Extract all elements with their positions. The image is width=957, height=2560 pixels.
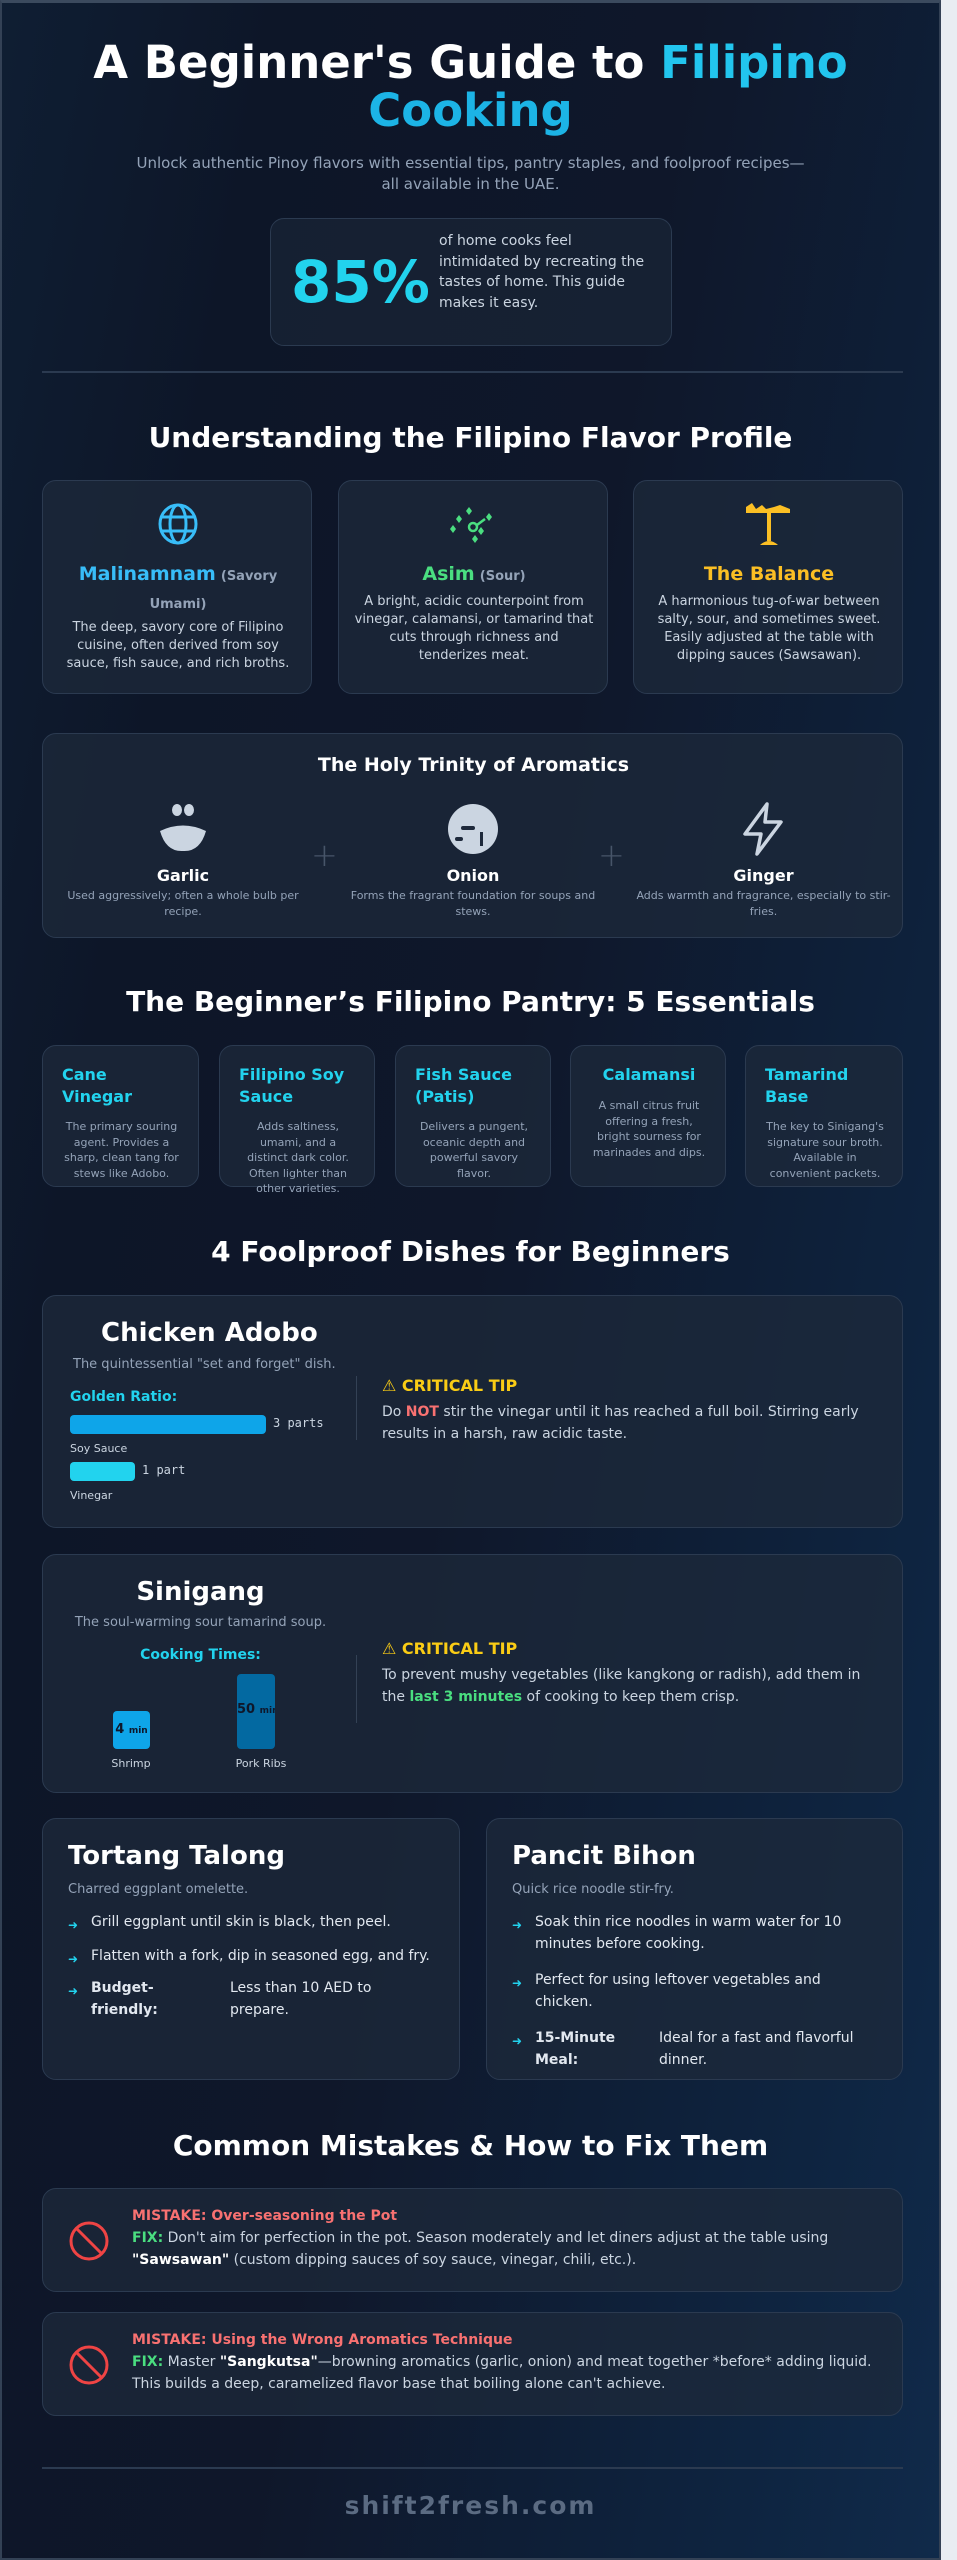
pantry card: cane vinegar: Cane [62, 1065, 107, 1084]
icon: scale [746, 503, 790, 545]
callout: critical tip [382, 1639, 860, 1705]
item: ginger [636, 802, 891, 918]
callout: critical tip: ⚠ CRITICAL TIP [382, 1376, 517, 1395]
chart: cooking times: Pork Ribs [236, 1757, 286, 1770]
panel: mistake 2: MISTAKE: Using the Wrong Aromatics Technique [132, 2332, 512, 2348]
chart: golden ratio: Soy Sauce [70, 1442, 127, 1455]
subtitle: The quintessential "set and forget" dish. [73, 1357, 336, 1372]
pantry card: soy sauce: Sauce [239, 1087, 293, 1106]
chart: cooking times: Shrimp [111, 1757, 151, 1770]
heading: Malinamnam (Savory Umami) [79, 563, 277, 612]
pantry card: soy sauce: Filipino Soy [239, 1065, 344, 1084]
panel: tortang talong: ➜ [68, 1952, 78, 1966]
panel: tortang talong: Budget- [91, 1980, 154, 1996]
panel: malinamnam [42, 480, 312, 694]
icon: onion [448, 804, 498, 854]
callout: critical tip: ⚠ CRITICAL TIP [382, 1639, 517, 1658]
icon: no [70, 2346, 108, 2384]
panel: pancit bihon: Ideal for a fast and flavorful dinner. [659, 2030, 854, 2068]
callout: critical tip: Do NOT stir the vinegar until it has reached a full boil. Stirring early results in a harsh, raw acidic taste. [382, 1404, 859, 1442]
subtitle: Unlock authentic Pinoy flavors with essential tips, pantry staples, and foolproof recipes—all available in the UAE. [136, 154, 805, 193]
panel: sinigang [42, 1554, 903, 1793]
label: Onion [447, 866, 499, 885]
panel: tortang talong: ➜ [68, 1984, 78, 1998]
panel: mistake 2 [42, 2312, 903, 2416]
panel: pancit bihon: Soak thin rice noodles in warm water for 10 minutes before cooking. [535, 1914, 841, 1952]
pantry card: cane vinegar: agent. Provides a [74, 1136, 169, 1148]
pantry card: fish sauce: Delivers a pungent, oceanic depth and powerful savory flavor. [420, 1120, 528, 1180]
heading: Asim (Sour) [422, 563, 526, 585]
icon: garlic [160, 804, 206, 851]
pantry card: calamansi [570, 1045, 726, 1187]
desc: Used aggressively; often a whole bulb per recipe. [67, 889, 299, 918]
panel: pancit bihon: Quick rice noodle stir-fry. [512, 1882, 674, 1897]
footer: shift2fresh.com [345, 2491, 596, 2520]
chart: golden ratio: 1 part [142, 1463, 185, 1477]
title: Chicken Adobo [101, 1318, 318, 1348]
label: Ginger [733, 866, 794, 885]
panel: tortang talong [42, 1818, 460, 2080]
panel: asim [338, 480, 608, 694]
heading: pantry: The Beginner’s Filipino Pantry: 5 Essentials [126, 985, 815, 1018]
callout: critical tip [382, 1376, 859, 1442]
pantry card: calamansi: A small citrus fruit offering a fresh, bright sourness for marinades and dips. [593, 1099, 705, 1158]
pantry card: cane vinegar: sharp, clean tang for [64, 1151, 179, 1164]
pantry card: fish sauce: (Patis) [415, 1087, 474, 1106]
label: Garlic [157, 866, 209, 885]
pantry card: calamansi: Calamansi [603, 1065, 695, 1084]
panel: balance [633, 480, 903, 694]
panel: pancit bihon: Perfect for using leftover vegetables and chicken. [535, 1972, 821, 2010]
panel: pancit bihon [486, 1818, 903, 2080]
stat box [270, 218, 672, 346]
icon: sour drops [450, 507, 492, 543]
panel: tortang talong: Charred eggplant omelette. [68, 1882, 248, 1897]
pantry card: fish sauce: Fish Sauce [415, 1065, 512, 1084]
callout: critical tip: To prevent mushy vegetables (like kangkong or radish), add them in the last 3 minutes of cooking to keep them crisp. [382, 1667, 860, 1705]
panel: pancit bihon: 15-Minute [535, 2030, 615, 2046]
pantry card: cane vinegar: stews like Adobo. [74, 1166, 169, 1180]
title [93, 36, 848, 137]
chart: cooking times: 4 min [115, 1722, 148, 1737]
panel: chicken adobo [42, 1295, 903, 1528]
chart: cooking times: Cooking Times: [140, 1647, 261, 1663]
stat number: 85% [291, 248, 430, 316]
panel: pancit bihon: Meal: [535, 2052, 578, 2068]
panel: mistake 1 [42, 2188, 903, 2292]
panel: holy trinity [42, 733, 903, 938]
pantry card: soy sauce: Adds saltiness, umami, and a distinct dark color. Often lighter than other varieties. [247, 1120, 349, 1195]
subtitle: The soul-warming sour tamarind soup. [75, 1615, 326, 1630]
pantry card: fish sauce [395, 1045, 551, 1187]
chart: golden ratio [70, 1389, 324, 1502]
panel: tortang talong: friendly: [91, 2002, 158, 2018]
text: A bright, acidic counterpoint from vinegar, calamansi, or tamarind that cuts through richness and tenderizes meat. [355, 594, 593, 663]
pantry card: cane vinegar [42, 1045, 199, 1187]
panel: pancit bihon: Pancit Bihon [512, 1841, 696, 1871]
panel: tortang talong: Tortang Talong [68, 1841, 285, 1871]
panel: tortang talong: Grill eggplant until skin is black, then peel. [91, 1914, 391, 1930]
heading: flavor profile: Understanding the Filipino Flavor Profile [149, 421, 792, 454]
item: onion [351, 804, 595, 918]
heading: The Balance [704, 563, 834, 585]
pantry card: tamarind: Base [765, 1087, 808, 1106]
pantry card: cane vinegar: Vinegar [62, 1087, 132, 1106]
item: garlic [67, 804, 299, 918]
pantry card: soy sauce [219, 1045, 375, 1187]
panel: tortang talong: ➜ [68, 1918, 78, 1932]
panel: pancit bihon: ➜ [512, 1976, 522, 1990]
pantry card: cane vinegar: The primary souring [66, 1120, 177, 1133]
plus: + [311, 836, 338, 874]
chart: cooking times [111, 1647, 286, 1770]
pantry card: tamarind: Tamarind [765, 1065, 848, 1084]
title: A Beginner's Guide to Filipino [93, 36, 848, 89]
plus: + [598, 836, 625, 874]
heading: mistakes: Common Mistakes & How to Fix Them [173, 2129, 768, 2162]
desc: Forms the fragrant foundation for soups and stews. [351, 889, 595, 918]
icon: globe [158, 504, 198, 544]
chart: golden ratio: 3 parts [273, 1416, 324, 1430]
title: Sinigang [136, 1577, 265, 1607]
panel: mistake 1: FIX: Don't aim for perfection in the pot. Season moderately and let diners adjust at the table using "Sawsawan" (custom dipping sauces of soy sauce, vinegar, chili, etc.). [132, 2230, 828, 2268]
panel: pancit bihon: ➜ [512, 2034, 522, 2048]
panel: tortang talong: Less than 10 AED to prepare. [230, 1980, 371, 2018]
panel: mistake 2: FIX: Master "Sangkutsa"—browning aromatics (garlic, onion) and meat together *before* adding liquid. This builds a deep, caramelized flavor base that boiling alone can't achieve. [132, 2354, 871, 2392]
chart: golden ratio: Vinegar [70, 1489, 112, 1502]
text: A harmonious tug-of-war between salty, sour, and sometimes sweet. Easily adjusted at the table with dipping sauces (Sawsawan). [658, 594, 880, 663]
icon: bolt [743, 802, 783, 856]
text: The deep, savory core of Filipino cuisine, often derived from soy sauce, fish sauce, and rich broths. [67, 620, 289, 671]
desc: Adds warmth and fragrance, especially to stir-fries. [636, 889, 891, 918]
panel: pancit bihon: ➜ [512, 1918, 522, 1932]
icon: no [70, 2222, 108, 2260]
pantry card: tamarind: The key to Sinigang's signature sour broth. Available in convenient packets. [766, 1120, 884, 1180]
pantry card: tamarind [745, 1045, 903, 1187]
stat text: of home cooks feel intimidated by recreating the tastes of home. This guide makes it easy. [439, 233, 644, 310]
heading: dishes: 4 Foolproof Dishes for Beginners [211, 1235, 730, 1268]
panel: mistake 1: MISTAKE: Over-seasoning the Pot [132, 2208, 397, 2224]
chart: golden ratio: Golden Ratio: [70, 1389, 177, 1405]
panel: tortang talong: Flatten with a fork, dip in seasoned egg, and fry. [91, 1948, 430, 1964]
title: Cooking [368, 84, 573, 137]
heading: The Holy Trinity of Aromatics [318, 754, 629, 776]
